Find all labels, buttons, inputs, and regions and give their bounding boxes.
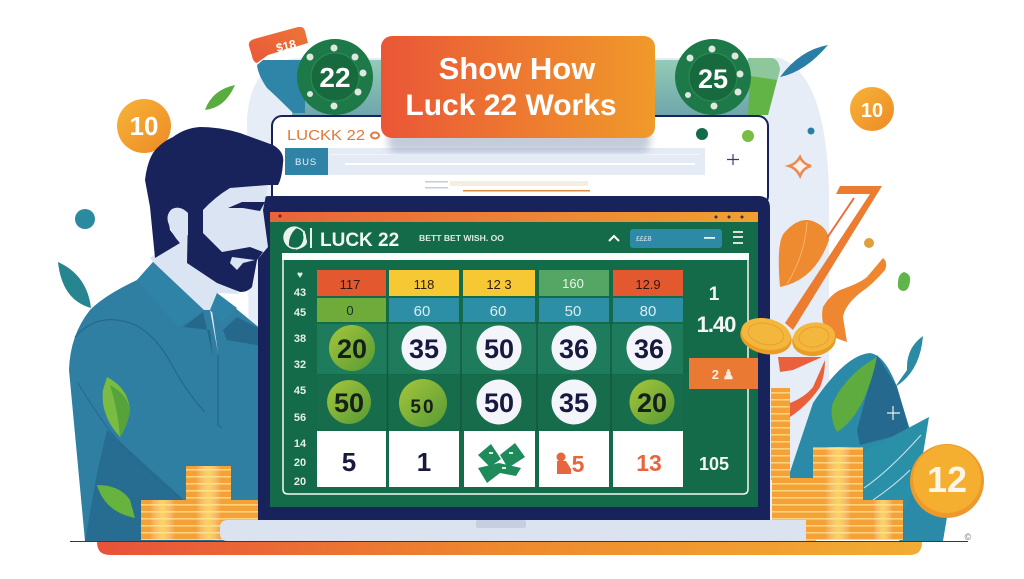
mouth [230,257,255,270]
screen [270,212,758,507]
white bottom row: 1 [417,447,431,477]
right column values: 1 [709,284,720,305]
header row: 12 3 [486,277,512,292]
left folder behind chip [257,60,385,115]
ground line [70,541,968,542]
chevron [609,236,619,241]
upper chip row: 35 [409,334,439,364]
price tag [249,27,308,63]
screen top bar [270,212,758,222]
left column numbers: 45 [294,385,306,397]
man body [69,240,262,541]
small green leaf [205,85,235,110]
address bar [328,148,705,175]
white bottom row: 5 [342,447,356,477]
background blob [247,58,829,520]
chip 22: 22 [319,62,351,93]
menu icon [733,232,743,243]
person icon and five [556,451,585,477]
green leaf [832,357,877,432]
right orange decorations [778,186,886,417]
second row: 80 [640,303,656,320]
window status dots [696,128,754,142]
coin 12 [910,444,984,518]
teal leaf body [788,353,947,541]
column dividers [388,322,611,431]
second row: 0 [346,303,354,318]
header row: 118 [414,277,434,292]
right column values [697,284,736,474]
green leaf lower [97,485,135,518]
teal dot [75,209,95,229]
teal leaf [58,262,91,308]
left column numbers: 56 [294,412,306,424]
teal pill: £££8 [636,236,652,243]
title banner [381,36,655,138]
left column numbers: 20 [294,457,306,469]
laptop [220,196,806,541]
lower chip row [317,375,683,429]
app name: LUCK 22 [320,230,399,251]
banner shadow [388,124,650,152]
upper chip row: 50 [484,334,514,364]
laptop base [220,520,806,541]
right coin 10: 10 [861,100,883,122]
header row: 12.9 [635,277,661,292]
orange swoosh [822,258,886,342]
plus icon [727,154,739,165]
right coin 10 [850,87,894,131]
blue dot [808,128,814,134]
left column numbers: 43 [294,287,306,299]
top-right blue leaf [780,45,828,77]
left column numbers: 14 [294,438,307,450]
left column numbers: 45 [294,307,306,319]
left column numbers: 38 [294,333,306,345]
man head [145,127,283,292]
left column numbers: ♥ [297,270,303,281]
star ornament [789,157,811,176]
teal plant [788,336,947,541]
price tag: $18 [275,37,298,55]
teal pill [630,229,722,248]
chip 22 [297,39,373,115]
browser logo text: LUCKK 22 [287,127,365,144]
lower chip row: 35 [559,388,589,418]
left coin 10 [117,99,171,153]
laptop notch [476,520,526,528]
left column numbers [294,270,307,488]
browser window [272,116,768,206]
copyright mark: © [965,532,972,542]
right column values: 1.40 [697,312,736,337]
lower chip row: 50 [484,388,514,418]
right column values: 105 [699,454,729,474]
left column numbers: 32 [294,359,306,371]
upper chip row: 36 [559,334,589,364]
coin 12: 12 [927,459,967,500]
chip 25 [675,39,751,115]
green blob [898,272,910,291]
right folder behind chip [650,58,780,115]
header row: 117 [340,277,360,292]
app logo [283,226,312,249]
orange leaf [779,220,829,287]
person icon and five: 5 [572,451,585,477]
second row [317,298,683,322]
upper chip row: 20 [337,334,367,364]
ear [168,208,188,243]
left coin 10: 10 [130,111,158,141]
chip 25: 25 [698,64,728,94]
second row: 60 [490,303,506,320]
left coin stacks [141,466,260,540]
left column numbers: 20 [294,476,306,488]
upper chip row [317,324,683,374]
dark face [857,355,910,445]
nav text: BETT BET WISH. OO [419,233,504,243]
orange action button: 2 ♟ [712,367,734,382]
red swoosh pieces [778,357,825,417]
gold coins pair [737,314,838,359]
gold dot [864,238,874,248]
title text: Luck 22 Works [405,89,617,122]
angled seven shape [785,186,882,330]
white bottom row [317,431,683,487]
collar [137,262,237,327]
bottom colour bar [97,542,922,555]
white bottom row: 13 [636,450,662,476]
neck [150,240,240,353]
hair and beard [145,127,283,292]
BUS tab: BUS [295,157,317,168]
eye [228,202,265,211]
laptop bezel [258,196,770,520]
wisp [895,336,923,387]
window lower lines [425,181,590,192]
plus sparkle [887,406,900,420]
lower chip row: 50 [334,388,364,418]
second row: 60 [414,303,430,320]
BUS tab [285,148,328,175]
header row: 160 [562,276,584,291]
shirt [69,262,262,541]
right coin stacks [771,388,903,541]
upper chip row: 36 [634,334,664,364]
shirt shadow [85,430,215,541]
money icon [478,443,525,483]
board frame [283,258,748,494]
lower chip row: 20 [637,388,667,418]
lower right leaf [863,417,929,510]
green leaf on arm [103,377,130,437]
title text: Show How [439,51,596,86]
face and neck skin [153,185,268,280]
second row: 50 [565,303,581,320]
orange action button [689,358,758,389]
header row [317,270,683,296]
lower chip row: 50 [410,397,436,418]
